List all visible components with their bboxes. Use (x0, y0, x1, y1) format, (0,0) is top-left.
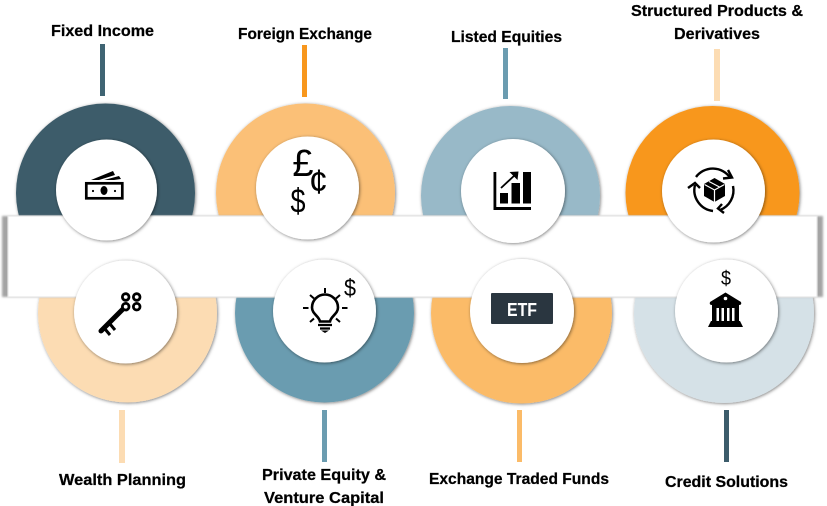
connector bars (100, 44, 729, 463)
heading: Exchange Traded Funds: Exchange Traded Funds (429, 471, 609, 488)
icon: pound, cent, dollar: $ (290, 182, 306, 220)
badge: structured product (662, 140, 765, 242)
icon: ETF label: ETF (507, 299, 537, 320)
heading: Structured Products & Derivatives: Derivatives (674, 26, 760, 43)
ring: Structured Products & Derivatives (626, 106, 800, 280)
icon: bar chart with arrow (494, 172, 531, 210)
ring: Exchange Traded Funds (431, 222, 612, 404)
icon: pound, cent, dollar: ¢ (309, 163, 328, 201)
ring: Listed Equities (421, 106, 600, 285)
badge: idea (273, 260, 376, 362)
icon: bank with dollar: $ (721, 268, 731, 290)
badge: key (74, 260, 177, 364)
heading: Private Equity & Venture Capital (262, 467, 386, 506)
ring: Foreign Exchange (216, 104, 395, 282)
icon: light bulb with dollar: $ (344, 275, 356, 302)
heading: Listed Equities: Listed Equities (451, 29, 562, 46)
icon: pound, cent, dollar (290, 143, 328, 220)
heading: Wealth Planning: Wealth Planning (59, 472, 186, 489)
heading: Structured Products & Derivatives: Structured Products & (631, 3, 803, 20)
badge: growth chart (461, 139, 565, 243)
icon: box with cycle arrows (688, 169, 733, 213)
heading: Credit Solutions: Credit Solutions (665, 474, 788, 491)
ring: Fixed Income (16, 104, 195, 282)
ring: Private Equity & Venture Capital (235, 224, 414, 402)
heading: Private Equity & Venture Capital: Private Equity & (262, 467, 386, 484)
icon: ornate key (101, 294, 140, 335)
icon: banknotes (86, 171, 122, 198)
badge: ETF (470, 259, 574, 363)
ring: Credit Solutions (634, 223, 814, 403)
heading: Structured Products & Derivatives (631, 3, 803, 43)
badge: money icon (56, 140, 157, 240)
ring: Wealth Planning (38, 224, 217, 402)
white central band (2, 216, 823, 297)
badge: currency symbols (256, 136, 359, 240)
icon: pound, cent, dollar: £ (292, 143, 314, 185)
badge: credit (675, 260, 778, 362)
heading: Fixed Income: Fixed Income (51, 23, 154, 40)
heading: Foreign Exchange: Foreign Exchange (238, 26, 372, 43)
